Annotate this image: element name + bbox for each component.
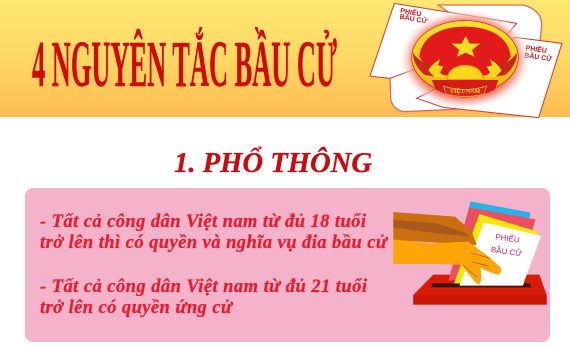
left ballot paper: BẦU CỬ [399,11,428,26]
pink glow around emblem [398,9,532,110]
white ballot [459,222,541,286]
gear [447,65,483,79]
emblem shield [412,21,518,97]
left ballot paper: PHIẾU [400,5,422,18]
banner background [0,0,570,117]
left ballot paper [370,3,517,78]
colored ballots [448,201,538,285]
emblem shield: VIỆT-NAM [450,87,481,95]
bullet: voting rights: trở lên thì có quyền và nghĩa vụ đia bầu cử [40,233,389,253]
red field [419,27,511,75]
bullet: voting rights [40,212,389,253]
hand [393,212,501,285]
bullet: voting rights: - Tất cả công dân Việt nam từ đủ 18 tuổi [40,212,367,232]
wheat left [413,53,440,77]
white ballot: PHIẾU [495,231,521,245]
star [452,36,480,57]
wheat right [490,53,517,77]
illustration: hand casting ballot [393,201,547,305]
right ballot paper: PHIẾU [525,42,548,55]
pink content panel [25,188,550,342]
ribbon with country name [432,80,498,97]
ribbon paper behind the emblem [390,5,542,112]
right ballot paper: BẦU CỬ [524,49,553,63]
bullet: candidacy rights: - Tất cả công dân Việt nam từ đủ 21 tuổi [40,277,368,297]
illustration: state emblem with ballots [370,3,562,118]
section heading: 1. PHỔ THÔNG [174,147,372,179]
bullet: candidacy rights [40,277,368,318]
right ballot paper [417,37,562,118]
white ballot: BẦU CỬ [490,244,523,258]
bullet: candidacy rights: trở lên có quyền ứng cử [40,298,234,318]
ballot box [413,275,547,305]
